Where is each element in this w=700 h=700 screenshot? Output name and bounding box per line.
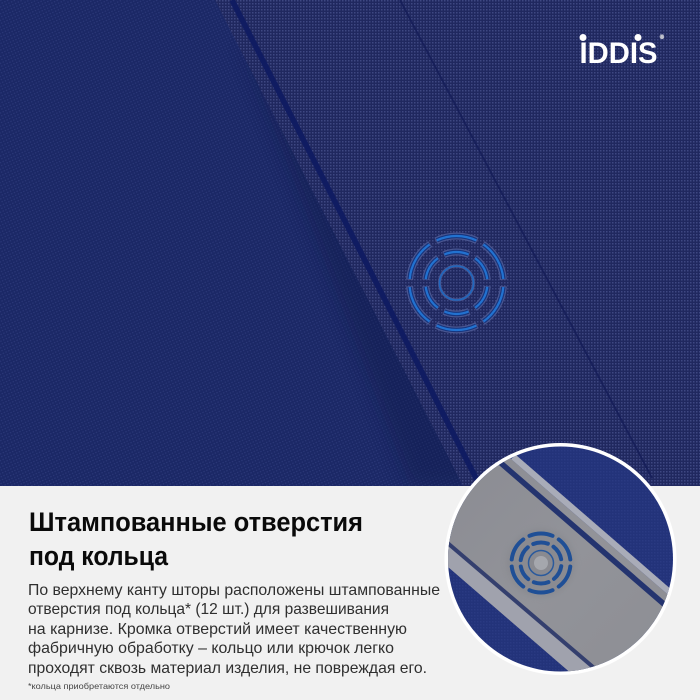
logo: iDDiS: ® (660, 34, 665, 41)
heading: под кольца (29, 541, 168, 571)
fabric: left curtain panel (0, 0, 463, 486)
body text: проходят сквозь материал изделия, не повреждая его. (28, 660, 427, 677)
inset: white ring (444, 443, 676, 675)
body text: По верхнему канту шторы расположены штампованные (28, 582, 440, 599)
inset: navy fabric (445, 443, 676, 675)
icon: stamped ring hole on fabric (410, 236, 504, 330)
inset: translucent gray band (448, 458, 668, 672)
body text: на карнизе. Кромка отверстий имеет качественную (28, 621, 407, 638)
panel: text background (0, 486, 700, 700)
body text: фабричную обработку – кольцо или крючок легко (28, 640, 394, 657)
logo: iDDiS: IDDIS (580, 37, 658, 70)
body text (28, 582, 440, 677)
inset: ring icon (510, 532, 572, 594)
footnote: *кольца приобретаются отдельно (28, 681, 170, 691)
inset: lower dark stripe (448, 542, 595, 668)
panel: fabric photo background (0, 0, 700, 486)
inset: upper light edge strip (511, 456, 670, 594)
crease line in the fabric (400, 0, 652, 478)
hem stripe: dark blue line (232, 0, 480, 486)
heading: Штампованные отверстия (29, 507, 363, 537)
body text: отверстия под кольца* (12 шт.) для развешивания (28, 601, 389, 618)
inset: upper dark stripe (498, 462, 665, 606)
inset: lower light edge strip (448, 546, 590, 671)
fabric: right side with hem (215, 0, 700, 486)
heading (29, 507, 363, 571)
shadow along the hem edge (260, 93, 462, 486)
inset: close-up of ring hole (444, 443, 676, 675)
